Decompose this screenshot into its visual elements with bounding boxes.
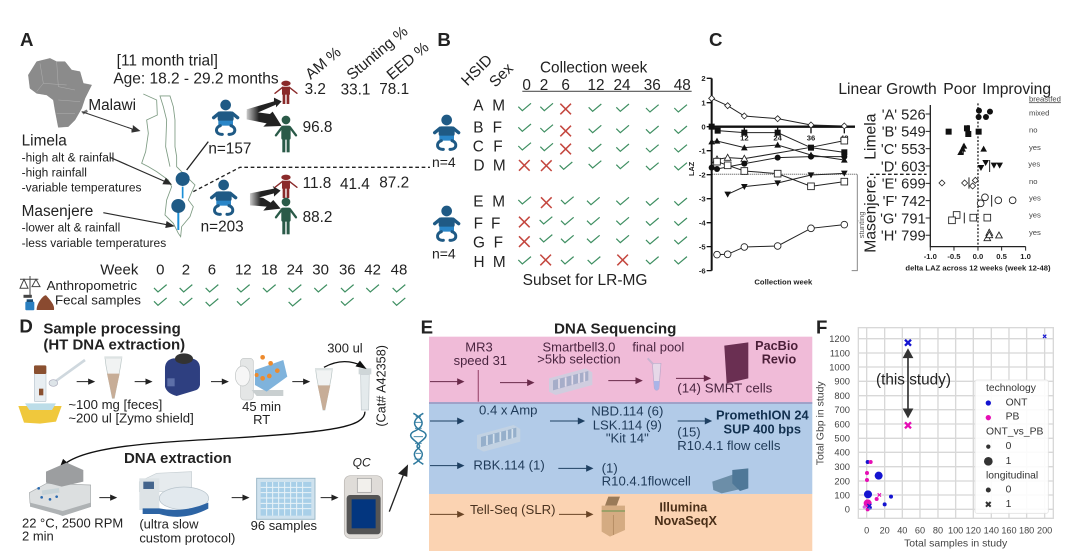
series lines [712,98,844,255]
sampling schedule header: 30 [312,261,329,278]
legend text: 0 [1006,485,1012,496]
Masenjere text: -less variable temperatures [22,236,166,250]
legend text: 1 [1006,456,1012,467]
thermomixer caption: 2 min [22,529,54,544]
this study label: (this study) [876,371,951,388]
icon: magnetic rack blue [477,425,520,452]
breastfed column: yes [1028,160,1040,169]
sampling schedule header: 6 [208,261,216,278]
Nanopore text [473,402,781,489]
axis titles: Total Gbp in study [815,381,826,465]
series markers [708,95,848,258]
breastfed column: no [1029,126,1037,135]
panel letter A: A [20,29,33,50]
x tick labels: 40 [897,525,907,535]
x axis tick labels: -0.5 [947,252,961,261]
subset caption: Subset for LR-MG [523,272,647,289]
extraction caption: custom protocol) [139,530,235,545]
participant labels: 'C' 553 [881,142,926,158]
sampling schedule header: 48 [391,261,407,278]
table headers [458,52,691,94]
chart title: Poor [943,81,976,98]
sample tube icon [25,299,34,310]
plot axes [926,103,1026,251]
thermomixer caption [22,515,123,544]
PacBio row text [454,340,684,368]
scatter points [863,460,893,511]
icon: NovaSeqX [602,497,625,537]
y tick labels: 700 [834,405,850,415]
table headers: 0 [522,77,531,94]
rotator caption [242,399,281,427]
participant rows: M [492,98,505,115]
legend box [975,380,1048,513]
legend text: PB [1006,412,1020,423]
icon: DNA helix [411,413,426,464]
catalogue number: (Cat# A42358) [375,345,389,427]
PromethION label [716,407,809,436]
300 ul label: 300 ul [327,341,363,356]
cohort connector lines [187,142,430,192]
icon: 96 well plate [257,478,315,519]
x axis tick labels: 0.0 [973,252,983,261]
x tick labels: 200 [1037,525,1052,535]
Limela text: -high alt & rainfall [22,150,114,164]
x axis numbers [740,134,849,143]
map of Malawi [142,94,195,237]
trial description: [11 month trial] [117,52,218,69]
process arrows row 2 [99,495,337,500]
n=4 group 1: n=4 [432,154,456,170]
icon: PacBio Revio [724,342,748,383]
participant rows [473,98,506,271]
participant labels: 'F' 742 [883,194,926,210]
x tick labels: 140 [984,525,999,535]
n=4 group 2: n=4 [432,246,456,262]
rotator caption: RT [253,412,270,427]
rotated column headers: AM % [302,44,345,83]
breastfed column: mixed [1029,108,1049,117]
group values: 87.2 [379,175,409,192]
outcome arrows upper [247,98,282,127]
axes [707,78,855,271]
table headers: 48 [674,77,691,94]
LAZ axis label: LAZ [687,161,696,176]
participant rows: E [473,194,483,211]
DNA sequencing heading: DNA Sequencing [554,320,676,337]
LAZ line chart [699,74,866,286]
icon: needle [476,370,480,402]
sample checks [518,103,687,264]
samples caption: 96 samples [251,518,318,533]
panel letter B: B [437,29,451,50]
sample processing heading [43,320,185,354]
group values: 11.8 [303,175,331,192]
Nanopore text: (15) [677,425,701,440]
sampling schedule header: 36 [339,261,356,278]
sampling schedule header: 18 [261,261,278,278]
x tick labels: 20 [880,525,890,535]
y axis numbers: -6 [699,266,706,275]
arrows to sites [103,157,173,227]
icon: rotator [235,355,287,400]
Masenjere text: -lower alt & rainfall [22,221,120,235]
Masenjere text [22,203,166,250]
Nanopore text: R10.4.1flowcell [602,474,691,489]
SMRT cells label: (14) SMRT cells [677,381,773,396]
trial description [113,52,279,87]
rotated column headers: EED % [384,39,433,84]
PacBio row text: speed 31 [454,353,507,368]
participant rows: F [491,216,500,233]
scale icon [20,276,40,297]
y axis numbers: 0 [701,122,706,131]
panel C: linear growth charts [687,29,1061,286]
y tick labels: 1100 [830,348,850,358]
Illumina arrows [430,512,592,517]
sampling schedule header: 12 [235,261,252,278]
legend text: ONT [1006,398,1028,409]
site labels [863,113,880,253]
x axis tick labels: -1.0 [924,252,937,261]
double arrow [904,350,912,417]
table headers: 6 [561,77,570,94]
y tick labels: 800 [834,391,850,401]
group values [303,81,409,226]
icon: yellow tray [18,403,62,424]
Masenjere text: Masenjere [22,203,93,220]
Limela text: -variable temperatures [22,180,142,194]
x axis tick labels: 0.5 [996,252,1008,261]
Limela text: -high rainfall [22,165,87,179]
sampling schedule header: 42 [364,261,381,278]
y axis numbers: -4 [699,218,706,227]
participant rows: F [494,235,503,252]
rotated column headers: Stunting % [344,23,412,84]
site labels: Limela [863,113,880,160]
healthy person lower [276,198,296,234]
Nanopore text: (1) [602,460,618,475]
table headers: Collection week [540,59,648,76]
y axis numbers: -5 [699,242,706,251]
dot points [939,108,1016,241]
y tick labels: 500 [834,434,850,444]
legend [975,380,1048,513]
extraction caption [139,516,235,545]
icon: thermomixer [29,463,91,516]
delta LAZ dot plot [863,103,1051,273]
y tick labels: 100 [834,490,850,500]
y tick labels: 900 [834,377,850,387]
y tick labels: 400 [834,448,850,458]
axis titles [815,381,1008,549]
Nanopore text: RBK.114 (1) [473,457,545,472]
PacBio label [755,339,798,367]
y tick labels [829,334,850,515]
x axis title: Collection week [754,277,813,286]
PacBio row text: Smartbell3.0 [543,340,615,355]
legend text: ONT_vs_PB [986,426,1043,437]
x axis tick labels [924,252,1031,261]
table headers: HSID [458,52,496,89]
baby icon Masenjere [212,180,236,214]
participant labels: 'H' 799 [881,229,926,245]
participant rows: G [473,235,485,252]
n=157: n=157 [208,140,251,157]
sampling schedule header [100,261,407,278]
means [963,108,992,241]
y axis numbers: -3 [699,194,706,203]
icon: second tube [315,368,333,410]
breastfed column: yes [1029,211,1041,220]
breastfed column: yes [1029,194,1041,203]
x axis numbers: 24 [773,134,783,143]
icon: magnetic rack pink [549,368,592,395]
y axis numbers: 2 [701,74,706,83]
y axis numbers [699,74,706,275]
Nanopore text: R10.4.1 flow cells [677,438,781,453]
sample caption: ~100 mg [feces] [68,397,162,412]
Limela text: Limela [22,132,67,149]
DNA extraction heading: DNA extraction [124,450,232,467]
y axis numbers: -1 [699,146,706,155]
y tick labels: 300 [834,462,850,472]
participant labels: 'B' 549 [882,125,926,141]
icon: spoon [49,360,85,386]
icon: spin column [359,368,371,410]
y tick labels: 200 [834,476,850,486]
x axis tick labels: 1.0 [1020,252,1031,261]
table headers: 12 [587,77,605,94]
PacBio row text: >5kb selection [537,352,621,367]
map of Africa [28,58,92,127]
Malawi label: Malawi [88,97,136,114]
x tick labels: 60 [915,525,925,535]
participant rows: M [493,254,506,271]
long arrow to extraction [60,412,365,469]
chart title: Improving [982,81,1051,98]
panel A: study cohort [20,23,433,310]
y tick labels: 1200 [829,334,850,344]
Illumina text: Tell-Seq (SLR) [470,502,556,517]
Nanopore text: "Kit 14" [606,430,649,445]
icon: fecal vial [34,365,46,402]
icon: QC device [344,476,383,538]
participant labels: 'E' 699 [882,177,926,193]
group values: 88.2 [303,209,332,226]
chart title: Linear Growth [838,81,937,98]
breastfed column: no [1029,177,1037,186]
panel letter F: F [816,316,827,337]
participant labels: 'G' 791 [880,211,926,227]
sampling schedule header: 0 [156,261,164,278]
stunting threshold and bracket [712,174,857,271]
icon: final pool tube [648,358,661,390]
table headers: 36 [644,77,661,94]
x tick labels: 180 [1019,525,1034,535]
PacBio label: PacBio [755,339,798,353]
baby icon group 1 [435,115,459,149]
y tick labels: 1000 [829,362,850,372]
arrow to sequencing [389,466,407,512]
participant rows: C [473,139,484,156]
site markers [171,172,190,230]
Illumina label: NovaSeqX [654,514,717,528]
legend text: technology [986,383,1037,394]
curved arrow to column [324,362,365,368]
PacBio label: Revio [762,353,796,367]
Nanopore text: LSK.114 (9) [593,417,662,432]
Nanopore text: NBD.114 (6) [591,404,663,419]
x tick labels: 80 [933,525,943,535]
sample caption [68,397,194,425]
chart title [838,81,1051,98]
participant rows: M [493,157,506,174]
x axis numbers: 12 [740,134,749,143]
baby icon Limela [214,100,238,134]
this study and reference markers [905,335,1046,428]
table headers: Sex [486,60,517,91]
participant rows: M [492,194,505,211]
participant rows: A [473,98,484,115]
PromethION label: SUP 400 bps [724,421,801,436]
table headers: 24 [613,77,631,94]
group values: 33.1 [341,82,370,99]
participant labels [880,107,926,245]
healthy person upper [276,116,296,152]
site labels: Masenjere: [863,175,880,253]
row labels: Anthropometric [47,278,137,293]
icon: flow cell [712,468,748,493]
band: PacBio [429,337,812,403]
panel F: study comparison scatter plot [815,316,1053,549]
table headers: 2 [540,77,548,94]
QC label: QC [353,456,371,470]
trial description: Age: 18.2 - 29.2 months [113,70,279,87]
participant rows: H [473,254,485,271]
group values: 41.4 [340,176,370,193]
sample caption: ~200 ul [Zymo shield] [68,410,194,425]
outcome arrows lower [250,186,281,211]
panel letter E: E [421,316,433,337]
y tick labels: 600 [834,419,850,429]
x axis title: delta LAZ across 12 weeks (week 12-48) [905,264,1051,273]
participant rows: F [493,120,502,137]
sample processing heading: Sample processing [43,320,181,337]
anthropometric checks [154,285,405,292]
x axis numbers: 48 [840,134,849,143]
icon: vortex mixer [165,353,200,396]
Illumina label [654,500,717,528]
axis titles: Total samples in study [904,538,1008,549]
y axis numbers: -2 [699,170,706,179]
stunted person lower [275,175,297,198]
y axis numbers: 1 [701,98,706,107]
stunting label: stunting [857,211,866,238]
process arrows row 1 [77,379,309,384]
breastfed column: yes [1029,228,1041,237]
plot frame and grid [858,328,1053,518]
participant rows: F [474,216,483,233]
breastfed column [1028,94,1061,237]
band: Illumina [429,494,812,551]
row labels [47,278,141,308]
x tick labels: 0 [864,525,869,535]
group values: 78.1 [379,81,409,98]
participant labels: 'A' 526 [882,107,926,123]
rotated column headers [302,23,433,84]
PromethION label: PromethION 24 [716,407,809,422]
Limela text [22,132,142,194]
participant rows: D [473,157,485,174]
x axis numbers: 36 [807,134,815,143]
PacBio row text: final pool [632,340,684,355]
group values: 3.2 [305,81,326,98]
panel letter C: C [709,29,722,50]
panel B: subset for long-read metagenomics [432,29,692,289]
divider between sites [870,172,927,176]
PacBio arrows [430,376,710,385]
panel letter D: D [19,316,33,337]
extraction caption: (ultra slow [139,516,199,531]
baby icon group 2 [435,206,459,240]
Nanopore text: 0.4 x Amp [479,402,538,417]
Illumina label: Illumina [659,500,708,514]
panel E: DNA sequencing [411,316,812,551]
fecal checks [154,298,405,306]
legend text [986,383,1043,510]
Nanopore arrows [430,418,711,471]
header underline [522,90,692,93]
participant rows: F [493,139,503,156]
sampling schedule header: 24 [287,261,303,278]
icon: sample tube [104,356,122,398]
PacBio row text: MR3 [465,340,493,355]
legend markers [984,400,993,507]
participant labels: 'D' 603 [881,159,926,175]
thermomixer caption: 22 °C, 2500 RPM [22,515,123,530]
group values: 96.8 [303,119,332,136]
band: Nanopore [429,402,812,494]
y tick labels: 0 [845,505,850,515]
arrow from Africa to Malawi [82,112,139,132]
rotator caption: 45 min [242,399,281,414]
breastfed column: breastfed [1029,94,1061,103]
panel D: sample processing [18,316,407,545]
sampling schedule header: 2 [182,261,190,278]
x tick labels: 100 [948,525,963,535]
stunted person upper [275,81,297,104]
x tick labels: 120 [966,525,981,535]
missing sample crosses [519,104,628,265]
sample processing heading: (HT DNA extraction) [43,337,185,354]
breastfed column: yes [1029,143,1041,152]
participant rows: B [473,120,483,137]
row labels: Fecal samples [55,293,141,308]
legend text: longitudinal [986,470,1038,481]
sampling schedule header: Week [100,261,139,278]
legend text: 1 [1006,499,1012,510]
icon: extraction robot [139,472,209,517]
x tick labels: 160 [1001,525,1017,535]
stool icon [37,295,54,310]
x tick labels [864,525,1052,535]
legend text: 0 [1006,441,1012,452]
n=203: n=203 [201,218,244,235]
